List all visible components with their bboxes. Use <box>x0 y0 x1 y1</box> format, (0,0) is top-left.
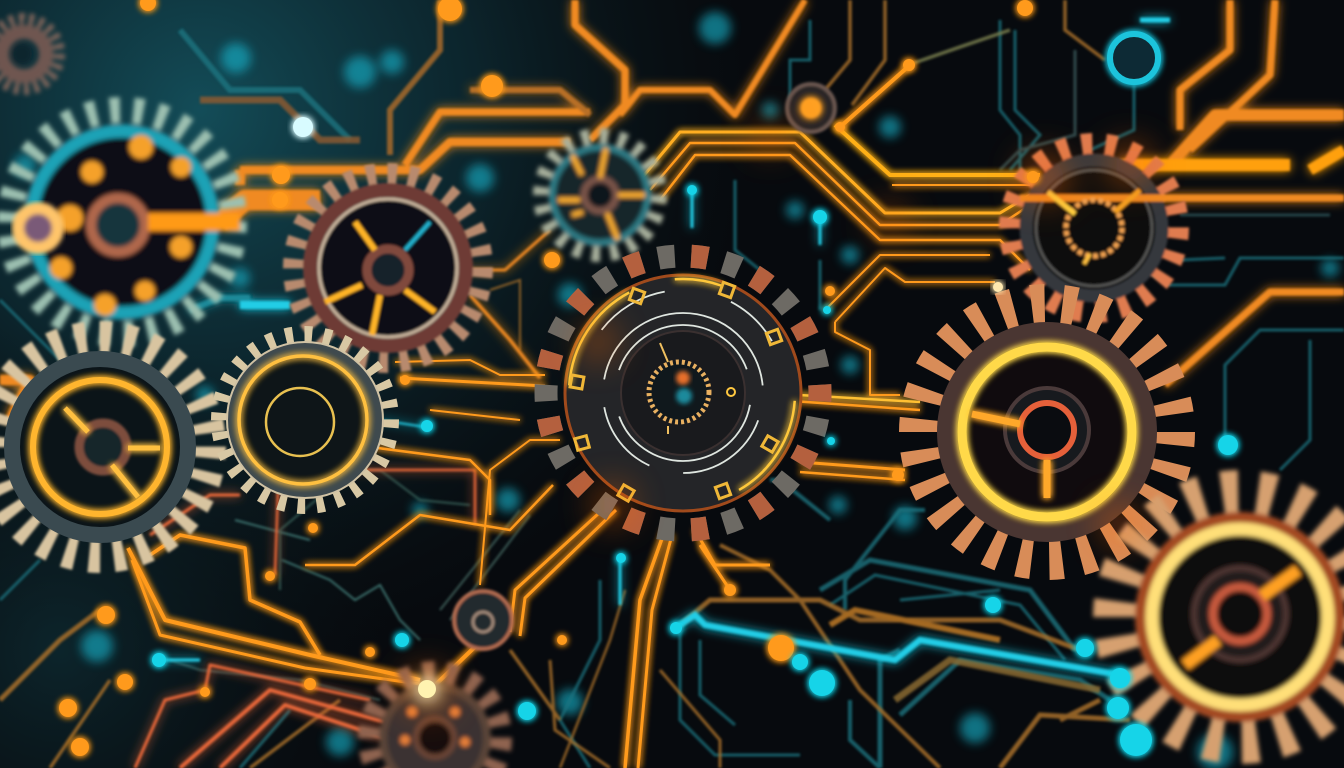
glowing cyan nodes <box>152 185 1238 756</box>
inner disc <box>621 331 745 455</box>
orange ambient glow <box>407 121 1150 710</box>
yellow arcs <box>569 279 797 507</box>
gear: left centre light <box>220 335 390 505</box>
gear: bottom centre <box>369 672 501 768</box>
pointer connector <box>727 388 735 396</box>
bright node right <box>993 282 1003 292</box>
icon: cyan ring top right <box>1110 34 1158 82</box>
gear: top centre small <box>542 137 658 253</box>
teeth <box>546 256 820 530</box>
gear: right large <box>919 304 1175 560</box>
blurred top orange traces <box>0 0 1344 420</box>
gear: lower left large <box>0 337 210 557</box>
glowing orange nodes <box>59 0 1039 756</box>
bright orange circuit traces <box>128 65 1100 768</box>
cyan circuit traces <box>160 20 1170 675</box>
gear: top left blurred <box>0 20 58 88</box>
node: ringed orange top <box>787 84 835 132</box>
white-cyan node top left <box>293 117 313 137</box>
soft glowing salmon traces <box>135 470 475 768</box>
body <box>565 275 801 511</box>
gear: bottom right large <box>1116 493 1344 741</box>
square studs <box>570 282 782 501</box>
white arcs <box>580 290 786 496</box>
gear: upper centre left <box>296 176 480 360</box>
gear: small orange blurred left <box>18 208 58 248</box>
bright core node bottom <box>418 680 436 698</box>
small gear node <box>454 591 512 649</box>
gear: centre main <box>546 256 820 530</box>
gear: upper left teal <box>10 110 240 334</box>
hub <box>649 343 709 434</box>
gear: top right <box>1011 145 1177 311</box>
